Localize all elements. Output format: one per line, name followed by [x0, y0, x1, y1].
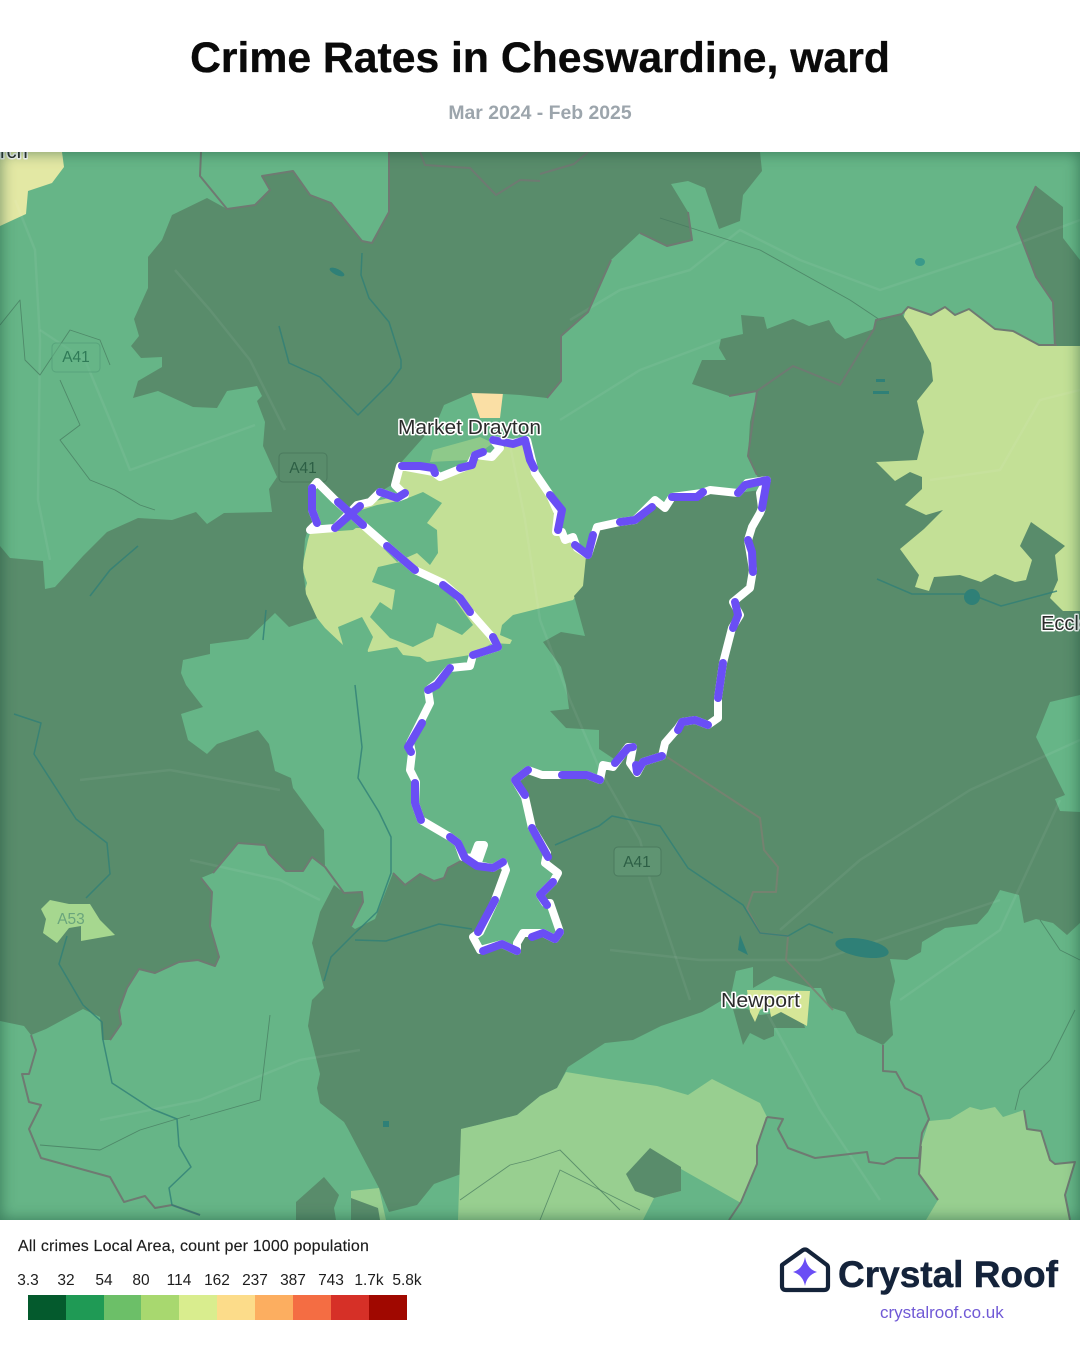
legend: 237: [242, 1272, 268, 1289]
road label A41 west: [52, 343, 100, 372]
region: tiny dark patch south edge: [351, 1198, 380, 1220]
region: pale area top-left: [0, 152, 64, 226]
choropleth map: [0, 152, 1080, 1220]
road label A41 south: A41: [623, 854, 651, 871]
legend: 387: [280, 1272, 306, 1289]
legend: 114: [167, 1272, 191, 1289]
road label A41 centre: [279, 453, 327, 482]
icon: Crystal Roof house logo: [780, 1247, 830, 1292]
region: pale area east: [870, 307, 1080, 625]
region: Newport moderate crime: [747, 990, 810, 1026]
subtitle: date range: Mar 2024 - Feb 2025: [448, 102, 632, 124]
region: low crime west and north: [0, 152, 762, 1040]
rivers and lakes: [14, 253, 1057, 1215]
region: mid green wedge south: [643, 1169, 741, 1220]
road label A41 west: A41: [62, 349, 90, 366]
region: Market Drayton moderate crime: [302, 443, 588, 662]
region: low crime far north-east: [1017, 186, 1080, 346]
legend: 80: [132, 1272, 150, 1289]
road network: [15, 200, 1080, 1200]
legend: 3.3: [17, 1272, 39, 1289]
region: small light patch south edge: [351, 1188, 386, 1220]
legend: 5.8k: [392, 1272, 422, 1289]
legend title: All crimes Local Area, count per 1000 population: [18, 1238, 369, 1255]
road label A41 south: [614, 847, 661, 876]
legend: 32: [57, 1272, 75, 1289]
website url: crystalroof.co.uk: [880, 1303, 1004, 1322]
legend: 743: [318, 1272, 344, 1289]
region: A53 town patch: [41, 900, 115, 943]
title: Crime Rates in Cheswardine, ward: [190, 34, 890, 82]
region: Market Drayton central hole: [352, 492, 442, 565]
region: Newport low crime patch: [733, 1009, 805, 1045]
legend scale labels: [17, 1272, 422, 1289]
region: low crime south and east: [308, 314, 1080, 1212]
legend: 54: [95, 1272, 113, 1289]
road label A41 centre: A41: [289, 460, 317, 477]
thin parish lines: [0, 218, 1080, 1220]
legend: 162: [204, 1272, 230, 1289]
borders between authorities: [22, 152, 1075, 1220]
legend: [17, 1238, 422, 1320]
region: Market Drayton north patch: [430, 437, 493, 462]
legend colour bar: [28, 1295, 407, 1320]
region: dark patch south: [626, 1148, 681, 1198]
region: light green south: [458, 1072, 767, 1220]
region: Market Drayton southern hole: [370, 562, 473, 647]
region: small dark patch south edge: [296, 1177, 339, 1220]
ward boundary: white base line: [310, 440, 767, 951]
ward boundary: purple dashes: [312, 440, 767, 951]
region: light green south-east: [919, 1107, 1075, 1220]
road label A53: A53: [57, 911, 85, 928]
legend: 1.7k: [354, 1272, 384, 1289]
brand name: Crystal Roof: [838, 1254, 1058, 1295]
region: Market Drayton town centre high crime: [471, 392, 503, 418]
map edge vignette: [0, 152, 1080, 1220]
place label: Market Drayton: Market Drayton: [398, 417, 541, 439]
region: Market Drayton south-west notch: [338, 617, 373, 652]
place label: Newport: Newport: [721, 990, 800, 1012]
